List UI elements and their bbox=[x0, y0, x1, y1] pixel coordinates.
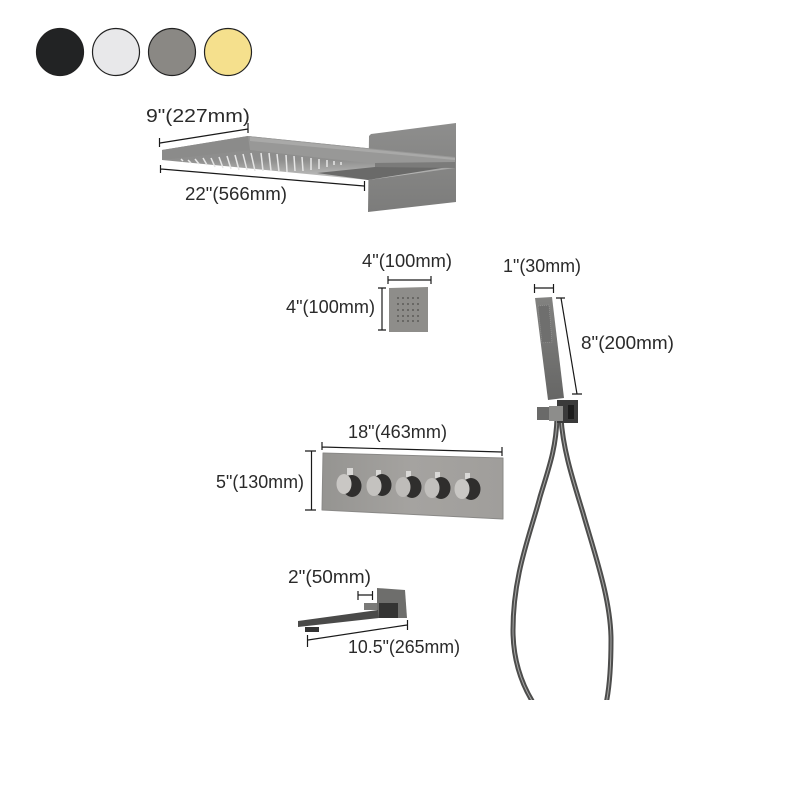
hose bbox=[513, 418, 611, 704]
spout wall block bbox=[377, 588, 407, 618]
dimension: hand shower length 8 in bbox=[556, 298, 674, 394]
swatch: brass gold bbox=[204, 28, 252, 76]
shower head body bbox=[162, 136, 455, 180]
jet nozzles bbox=[397, 297, 419, 322]
spout outlet bbox=[305, 627, 319, 632]
infographic canvas bbox=[36, 28, 673, 700]
dimension: hand shower width 1 in: 1"(30mm) bbox=[503, 256, 581, 276]
thermostatic valve panel bbox=[322, 453, 503, 519]
knob 1 bbox=[336, 468, 362, 497]
panel plate bbox=[322, 453, 503, 519]
dimension: jet height 4 in bbox=[286, 288, 386, 330]
colour swatches bbox=[36, 28, 252, 76]
swatch: white bbox=[92, 28, 140, 76]
wall plate bbox=[368, 123, 456, 212]
tub spout bbox=[298, 588, 407, 632]
wall bracket bbox=[537, 400, 578, 423]
dimension: spout length 10.5 in bbox=[308, 620, 460, 657]
dimension: jet width 4 in: 4"(100mm) bbox=[362, 251, 452, 271]
knob 3 bbox=[396, 471, 422, 498]
water nozzle slots bbox=[181, 153, 341, 172]
dimension: panel height 5 in bbox=[216, 451, 316, 510]
dimension: head length 22 in: 22"(566mm) bbox=[185, 184, 287, 204]
dimension: head width 9 in: 9"(227mm) bbox=[146, 106, 250, 126]
dimension: head width 9 in bbox=[146, 106, 250, 147]
jet plate bbox=[389, 287, 428, 332]
dimension: jet width 4 in bbox=[362, 251, 452, 284]
spray holes bbox=[538, 305, 552, 343]
dimension: head length 22 in bbox=[160, 165, 364, 204]
knob 5 bbox=[454, 473, 480, 500]
dimension: spout depth 2 in bbox=[288, 567, 372, 600]
dimension: jet height 4 in: 4"(100mm) bbox=[286, 297, 375, 317]
dimension: spout length 10.5 in: 10.5"(265mm) bbox=[348, 637, 460, 657]
dimension: spout depth 2 in: 2"(50mm) bbox=[288, 567, 371, 587]
knob 2 bbox=[366, 470, 392, 496]
swatch: black bbox=[36, 28, 84, 76]
dimension: panel width 18 in: 18"(463mm) bbox=[348, 422, 447, 442]
rain shower head with wall plate bbox=[162, 123, 456, 212]
knob 4 bbox=[424, 472, 450, 499]
spout arm bbox=[298, 610, 379, 627]
dimension: panel width 18 in bbox=[322, 422, 502, 456]
hand shower with hose bbox=[513, 297, 611, 704]
swatch: gunmetal grey bbox=[148, 28, 196, 76]
dimension: hand shower length 8 in: 8"(200mm) bbox=[581, 333, 674, 353]
spout collar bbox=[364, 603, 377, 610]
hand shower head bbox=[535, 297, 564, 400]
body jet bbox=[389, 287, 428, 332]
dimension: panel height 5 in: 5"(130mm) bbox=[216, 472, 304, 492]
dimension: hand shower width 1 in bbox=[503, 256, 581, 293]
